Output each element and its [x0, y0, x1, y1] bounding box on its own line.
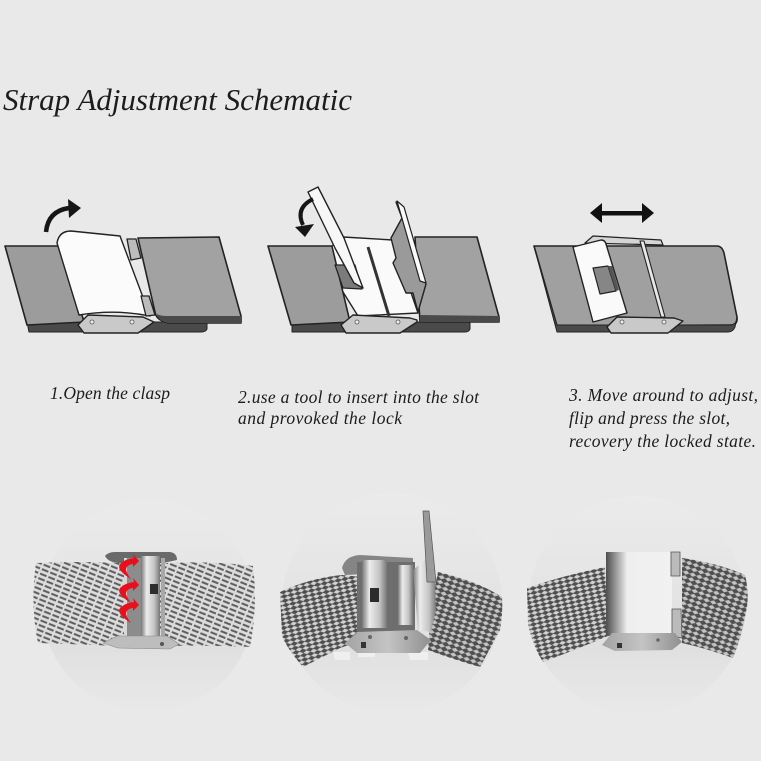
- hinges: [671, 552, 682, 638]
- caption 3: recovery the locked state.: [569, 431, 756, 451]
- hinge tabs: [127, 239, 155, 316]
- clasp centre panel: [141, 556, 160, 637]
- tool pin: [423, 511, 436, 582]
- title: Strap Adjustment Schematic: [3, 82, 352, 117]
- clasp plate: [345, 630, 431, 653]
- arrow: both directions: [590, 203, 654, 223]
- rod: [640, 241, 665, 317]
- mesh band: [33, 562, 255, 647]
- clasp plate: [602, 633, 682, 651]
- clasp cover: [606, 552, 672, 636]
- clasp back: [124, 558, 141, 637]
- raised flap: [308, 187, 363, 288]
- clasp column right: [398, 565, 413, 625]
- clasp top flange: [105, 552, 177, 563]
- left mesh: [527, 567, 608, 662]
- photo 2: opened clasp with tool: [280, 493, 502, 713]
- strap end nubs: [333, 652, 428, 660]
- top flap: [585, 236, 663, 245]
- clasp plate: [103, 636, 179, 649]
- caption 3: 3. Move around to adjust,: [568, 385, 758, 405]
- clasp right rail: [161, 558, 165, 637]
- right strap: [138, 237, 241, 323]
- right mesh: [428, 572, 502, 667]
- photo disc: [42, 500, 254, 712]
- arrow: open upward: [46, 199, 81, 232]
- clasp slot: [150, 584, 158, 594]
- strap edge: [534, 246, 737, 332]
- right mesh: [682, 558, 748, 658]
- caption 3: flip and press the slot,: [569, 408, 730, 428]
- left strap: [5, 246, 84, 325]
- lower strap edge: [292, 322, 470, 332]
- caption 2: 2.use a tool to insert into the slot: [238, 387, 480, 407]
- caption 2: and provoked the lock: [238, 408, 403, 428]
- photo disc: [282, 493, 502, 713]
- photo disc: [528, 496, 746, 714]
- clasp top plate: [342, 555, 413, 575]
- photo 3: closed clasp: [527, 496, 748, 714]
- red arrows: [119, 554, 139, 623]
- strap: [534, 246, 737, 326]
- clasp column left: [362, 560, 387, 628]
- open clasp cover: [57, 231, 150, 316]
- hinge: [413, 558, 436, 632]
- sliding clasp cover: [573, 240, 627, 322]
- left strap: [268, 246, 350, 325]
- clasp left rail: [124, 558, 127, 637]
- caption 1: 1.Open the clasp: [50, 383, 170, 403]
- right strap: [415, 237, 499, 322]
- clasp plate: [607, 317, 683, 333]
- left mesh: [280, 575, 363, 667]
- caption 3: [568, 385, 758, 451]
- diagram 2: insert tool: [268, 187, 499, 333]
- photo 1: mesh strap with clasp and red arrows: [33, 500, 255, 712]
- cover slot: [593, 266, 616, 294]
- clasp interior: [332, 237, 418, 316]
- caption 2: [238, 387, 480, 428]
- centre groove: [368, 247, 389, 316]
- right flap: [391, 202, 426, 312]
- clasp plate: [78, 315, 154, 333]
- diagram 3: slide to adjust: [534, 203, 737, 333]
- clasp interior: [357, 562, 415, 632]
- slot: [335, 265, 362, 289]
- diagram 1: open the clasp: [5, 199, 241, 333]
- arrow: fold back: [295, 199, 314, 237]
- lower strap edge: [27, 322, 207, 332]
- clasp plate: [341, 315, 417, 333]
